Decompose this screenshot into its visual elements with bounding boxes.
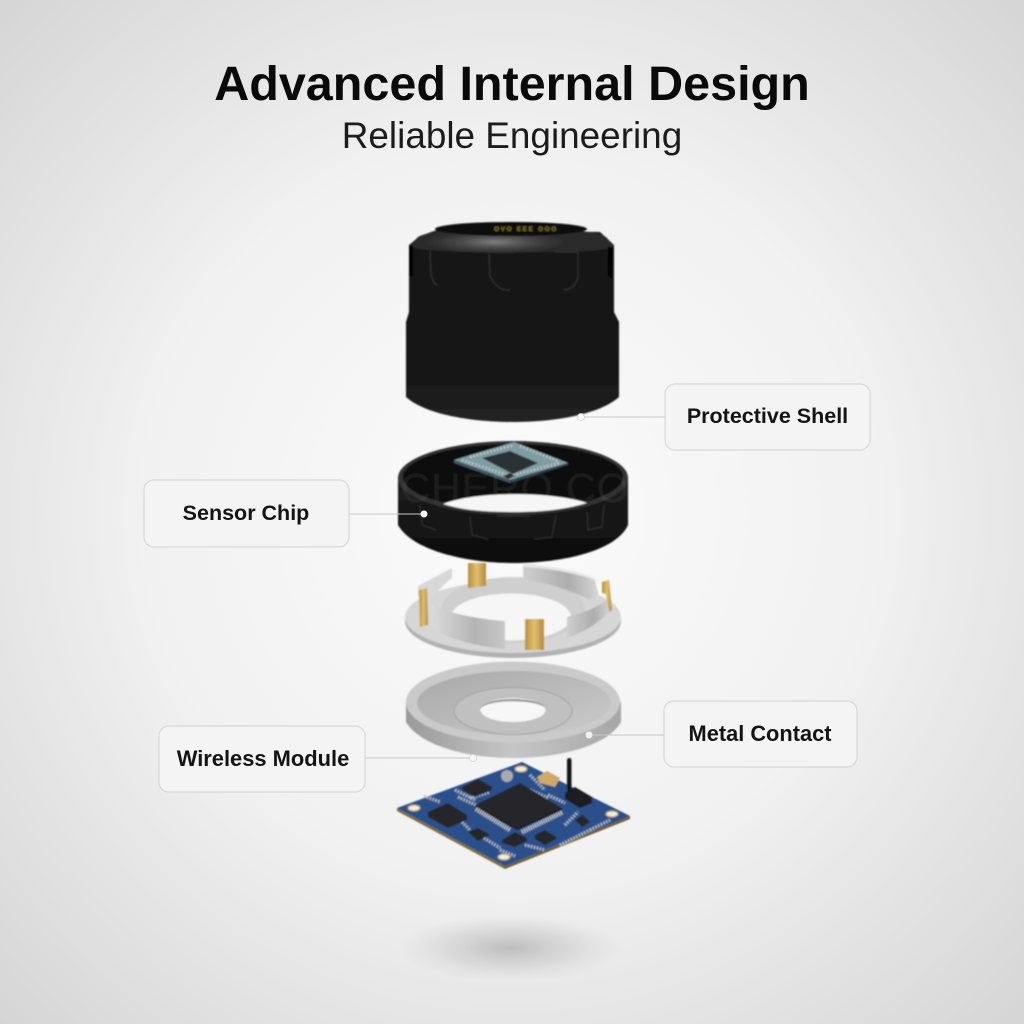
ring rim bbox=[398, 441, 628, 515]
shoulder highlight bbox=[425, 230, 565, 254]
label text: Wireless Module bbox=[177, 746, 349, 771]
display text: OVO EEE OOO bbox=[494, 226, 558, 233]
pcb edge bbox=[397, 808, 505, 869]
floor shadow bbox=[398, 914, 622, 982]
callout: sensor chip bbox=[144, 480, 428, 547]
label box bbox=[159, 726, 365, 792]
metal contact disc component bbox=[406, 662, 621, 758]
wireless module pcb bbox=[397, 758, 630, 869]
faint watermark: CHERO CO bbox=[401, 465, 629, 511]
mounting holes bbox=[408, 766, 618, 860]
antenna connector bbox=[565, 787, 592, 808]
front right wall bbox=[567, 597, 611, 638]
title: Advanced Internal Design bbox=[214, 57, 810, 111]
pcb board bbox=[397, 762, 630, 866]
callout: protective shell bbox=[578, 384, 870, 450]
label box bbox=[144, 480, 349, 547]
callout: wireless module bbox=[159, 726, 476, 792]
shell body bbox=[406, 230, 619, 422]
leader line bbox=[589, 734, 664, 736]
leader line bbox=[365, 757, 473, 759]
main processor bbox=[475, 805, 562, 830]
ring opening bbox=[443, 494, 587, 512]
solder detail bbox=[424, 775, 610, 856]
leader line bbox=[581, 416, 665, 418]
ring inside wall bbox=[403, 444, 623, 510]
inner opening bbox=[451, 594, 571, 640]
back right wall bbox=[523, 564, 599, 600]
sensor ring component bbox=[398, 441, 629, 563]
antenna bbox=[567, 758, 572, 792]
disc recess bbox=[417, 671, 611, 735]
shell display window bbox=[435, 222, 587, 236]
centre hole bbox=[480, 698, 546, 722]
crystal bbox=[537, 771, 560, 787]
gold contacts bbox=[419, 563, 612, 650]
ring notches bbox=[420, 505, 604, 539]
disc rim bbox=[406, 662, 620, 742]
small ics bbox=[428, 779, 590, 847]
label text: Metal Contact bbox=[689, 721, 831, 746]
shell grip notches bbox=[430, 251, 578, 290]
silver plate edge bbox=[405, 584, 621, 658]
inner ledge bbox=[441, 577, 585, 643]
callout: metal contact bbox=[586, 701, 857, 767]
ring outer wall bbox=[398, 478, 628, 563]
board speckle bbox=[462, 445, 560, 476]
leader line bbox=[349, 513, 424, 515]
silver plate bbox=[405, 581, 621, 653]
sensor chip board bbox=[454, 442, 568, 480]
label text: Sensor Chip bbox=[183, 501, 309, 525]
protective shell component bbox=[406, 222, 619, 422]
centre boss bbox=[454, 688, 572, 734]
front left wall bbox=[430, 604, 505, 649]
shell shoulder bbox=[409, 227, 614, 252]
label box bbox=[665, 384, 870, 450]
silver contact ring component bbox=[405, 563, 621, 658]
subtitle: Reliable Engineering bbox=[342, 115, 682, 156]
label text: Protective Shell bbox=[687, 404, 848, 428]
back left wall bbox=[418, 568, 452, 604]
shell side recesses bbox=[409, 245, 613, 280]
chip bbox=[482, 451, 538, 474]
disc side wall bbox=[406, 702, 621, 758]
label box bbox=[664, 701, 857, 767]
processor pins bbox=[476, 809, 563, 832]
trim component bbox=[501, 770, 513, 782]
